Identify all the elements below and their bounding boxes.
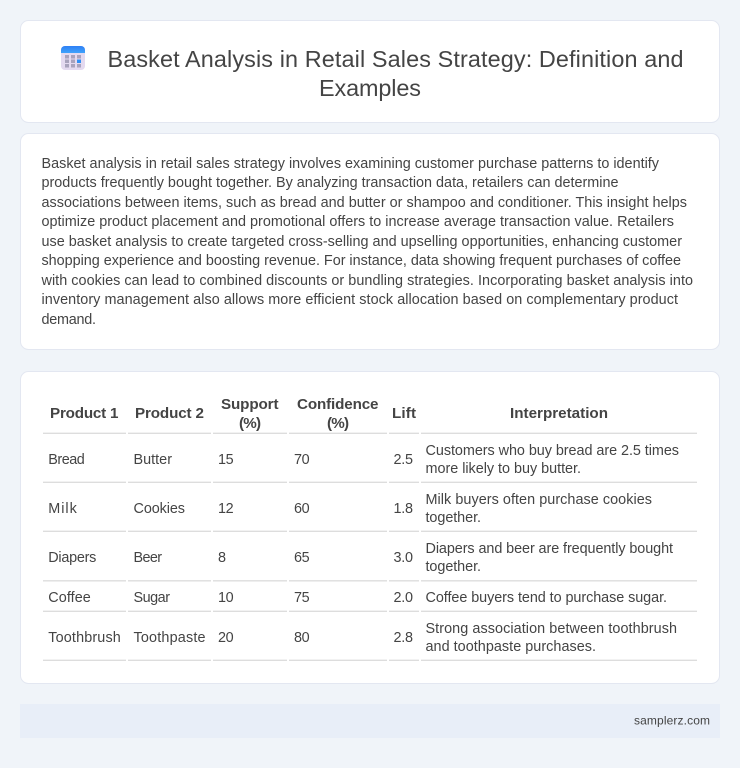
- table row: diapers and beer: 8: [218, 550, 226, 566]
- panel: table card: [20, 372, 720, 684]
- table row: diapers and beer: Diapers and beer are frequently bought: [426, 541, 673, 557]
- table row: diapers and beer: [48, 541, 673, 575]
- text block: description paragraph: [40, 156, 693, 328]
- table row: bread and butter: [48, 443, 679, 477]
- text block: description paragraph: Basket analysis in retail sales strategy involves examining customer purchase patterns to identify: [42, 156, 660, 172]
- table: column headers: Lift: [392, 405, 416, 422]
- text block: description paragraph: inventory management also allows more efficient stock allocation based on complementary product: [42, 292, 678, 308]
- icon: calendar: [61, 46, 85, 70]
- table row: bread and butter: Butter: [134, 452, 172, 468]
- table row: bread and butter: 70: [294, 452, 310, 468]
- text block: description paragraph: with cookies can lead to combined discounts or bundling strategies. Incorporating basket analysis into: [40, 273, 693, 289]
- table: column headers: (%): [327, 415, 349, 432]
- title: Basket Analysis in Retail Sales Strategy: Definition and: [108, 46, 684, 72]
- table row: coffee and sugar: 75: [294, 590, 310, 606]
- text block: description paragraph: shopping experience and boosting revenue. For instance, data showing frequent purchases of coffee: [42, 253, 681, 269]
- text block: description paragraph: demand.: [42, 312, 96, 328]
- table row: diapers and beer: 3.0: [394, 550, 413, 566]
- table row: toothbrush and toothpaste: 20: [218, 630, 234, 646]
- table row: diapers and beer: Beer: [134, 550, 162, 566]
- table row: diapers and beer: Diapers: [48, 550, 96, 566]
- table: column headers: Product 2: [135, 405, 204, 422]
- table row: coffee and sugar: Coffee buyers tend to purchase sugar.: [426, 590, 667, 606]
- table: row dividers: [43, 433, 697, 660]
- table row: coffee and sugar: Coffee: [48, 590, 91, 606]
- table row: milk and cookies: 1.8: [394, 501, 413, 517]
- table row: toothbrush and toothpaste: Strong association between toothbrush: [426, 621, 677, 637]
- table row: milk and cookies: Milk: [48, 501, 78, 517]
- table row: diapers and beer: 65: [294, 550, 310, 566]
- table row: toothbrush and toothpaste: and toothpaste purchases.: [426, 639, 596, 655]
- table row: coffee and sugar: [48, 590, 667, 606]
- table row: milk and cookies: [48, 492, 652, 526]
- text block: description paragraph: products frequently bought together. By analyzing transaction data, retailers can determine: [42, 175, 618, 191]
- table row: coffee and sugar: Sugar: [134, 590, 170, 606]
- table row: bread and butter: Customers who buy bread are 2.5 times: [426, 443, 679, 459]
- table row: diapers and beer: together.: [426, 559, 481, 575]
- table row: toothbrush and toothpaste: 2.8: [394, 630, 413, 646]
- title: Examples: [319, 75, 421, 101]
- table row: milk and cookies: Milk buyers often purchase cookies: [426, 492, 652, 508]
- table row: milk and cookies: together.: [426, 510, 481, 526]
- table row: coffee and sugar: 10: [218, 590, 234, 606]
- table: column headers: Confidence: [297, 396, 378, 413]
- table row: toothbrush and toothpaste: Toothpaste: [134, 630, 206, 646]
- table: column headers: (%): [239, 415, 261, 432]
- table: column headers: Support: [221, 396, 278, 413]
- table row: toothbrush and toothpaste: 80: [294, 630, 310, 646]
- panel: description card: [20, 134, 720, 350]
- table row: milk and cookies: 60: [294, 501, 310, 517]
- table row: bread and butter: 2.5: [394, 452, 413, 468]
- table row: toothbrush and toothpaste: [48, 621, 677, 655]
- table: column headers: [50, 396, 608, 432]
- footer bar: [20, 704, 720, 738]
- table row: bread and butter: 15: [218, 452, 234, 468]
- table: column headers: Product 1: [50, 405, 119, 422]
- title: [108, 46, 684, 101]
- table row: bread and butter: Bread: [48, 452, 85, 468]
- panel: header card: [20, 20, 720, 122]
- text block: description paragraph: use basket analysis to create targeted cross-selling and upselling opportunities, enhancing customer: [42, 234, 682, 250]
- table row: milk and cookies: Cookies: [134, 501, 185, 517]
- table: column headers: Interpretation: [510, 405, 608, 422]
- footer source text: samplerz.com: [634, 714, 710, 728]
- table row: toothbrush and toothpaste: Toothbrush: [48, 630, 121, 646]
- text block: description paragraph: optimize product placement and promotional offers to increase average transaction value. Retailers: [42, 214, 674, 230]
- table row: bread and butter: more likely to buy butter.: [426, 461, 581, 477]
- table row: coffee and sugar: 2.0: [394, 590, 413, 606]
- table row: milk and cookies: 12: [218, 501, 234, 517]
- text block: description paragraph: associations between items, such as bread and butter or shampoo and conditioner. This insight helps: [42, 195, 687, 211]
